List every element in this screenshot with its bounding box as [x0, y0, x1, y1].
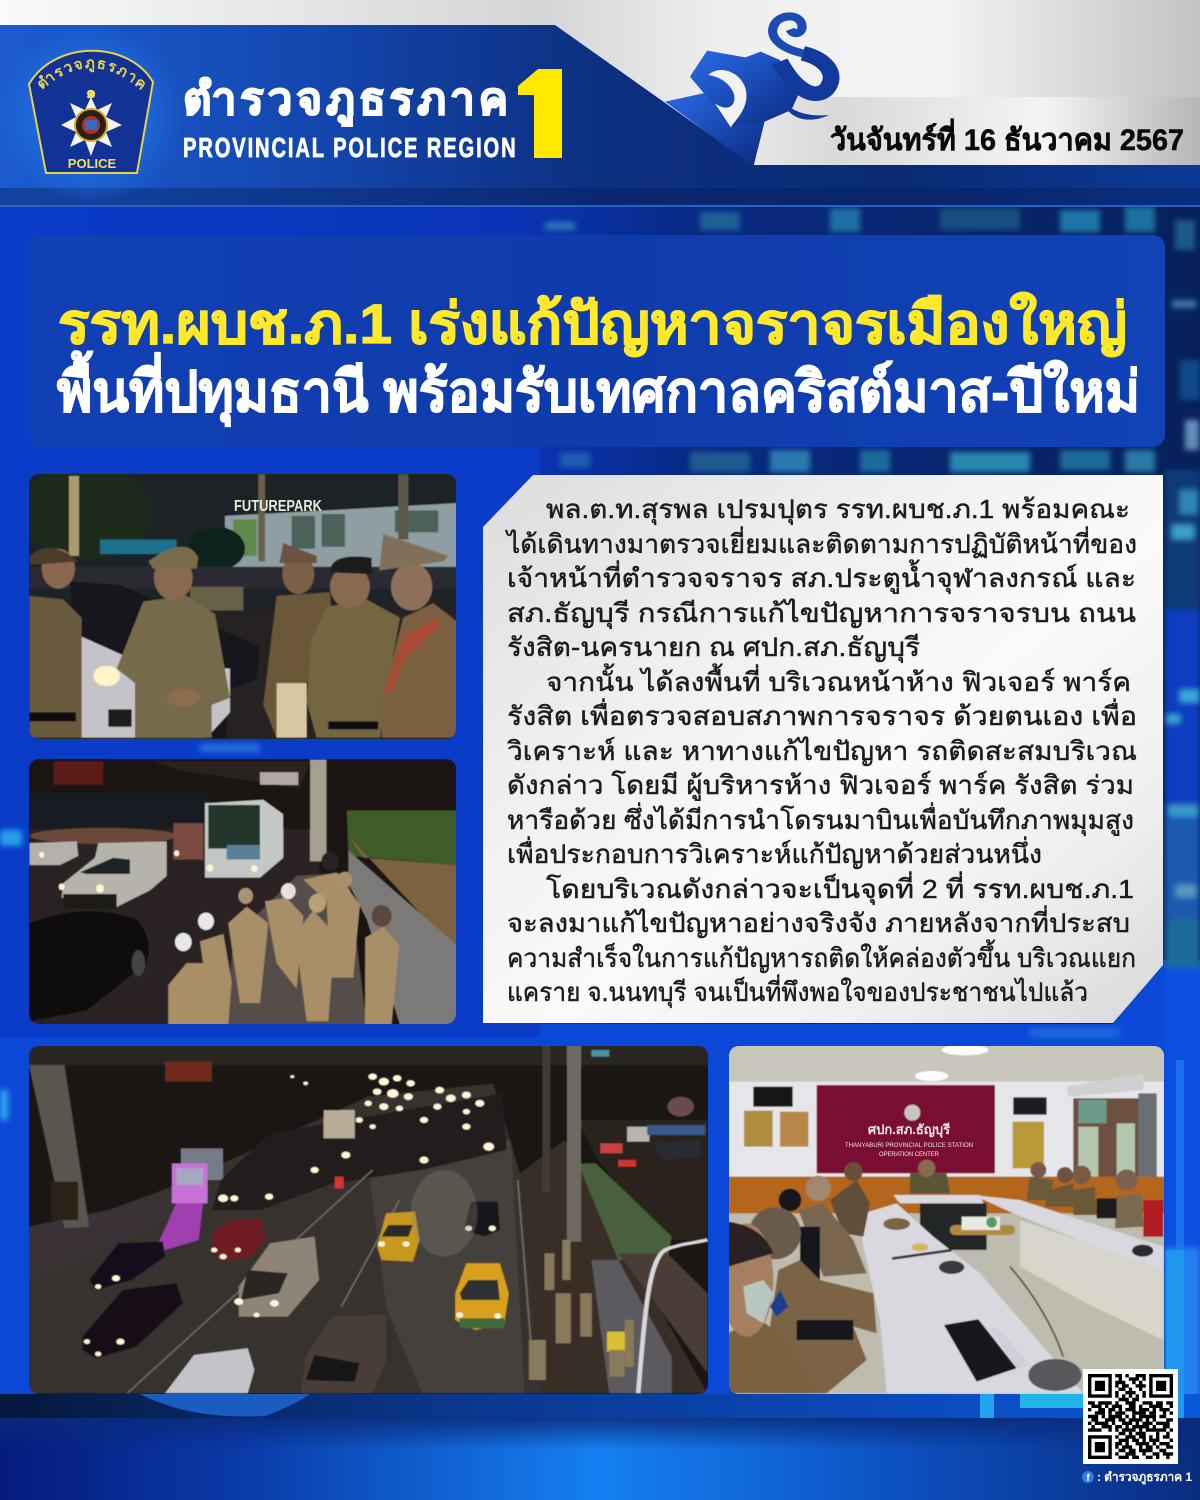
photo: officers beside traffic and bus: [29, 759, 457, 1025]
lower background strip: [0, 1394, 1200, 1418]
paragraph 1: รังสิต-นครนายก ณ ศปก.สภ.ธัญบุรี: [507, 632, 920, 663]
heading: organisation name: ตำรวจภูธรภาค: [183, 75, 508, 126]
facebook credit: : ตำรวจภูธรภาค 1: [1097, 1470, 1192, 1485]
paragraph 2: จากนั้น ได้ลงพื้นที่ บริเวณหน้าห้าง ฟิวเจอร์ พาร์ค: [546, 663, 1131, 697]
paragraph 2: ดังกล่าว โดยมี ผู้บริหารห้าง ฟิวเจอร์ พาร์ค รังสิต ร่วม: [507, 770, 1134, 801]
photo wall sign text: ศปก.สภ.ธัญบุรี: [868, 1122, 950, 1138]
heading: organisation name: [183, 75, 516, 164]
paragraph 3: ความสำเร็จในการแก้ปัญหารถติดให้คล่องตัวขึ้น บริเวณแยก: [507, 939, 1136, 973]
title line 1: รรท.ผบช.ภ.1 เร่งแก้ปัญหาจราจรเมืองใหญ่: [58, 291, 1127, 357]
icon: police badge: ๑: [86, 83, 96, 102]
paragraph 1: เจ้าหน้าที่ตำรวจจราจร สภ.ประตูน้ำจุฬาลงกรณ์ และ: [507, 559, 1136, 594]
paragraph 3: จะลงมาแก้ไขปัญหาอย่างจริงจัง ภายหลังจากที่ประสบ: [507, 905, 1130, 938]
icon: elephant: [665, 16, 831, 165]
paragraph 2: เพื่อประกอบการวิเคราะห์แก้ปัญหาด้วยส่วนหนึ่ง: [507, 836, 1042, 869]
paragraph 2: รังสิต เพื่อตรวจสอบสภาพการจราจร ด้วยตนเอง เพื่อ: [507, 698, 1137, 731]
header top grey strip: [0, 0, 1200, 166]
panel: title: [29, 235, 1165, 447]
paragraph 3: แคราย จ.นนทบุรี จนเป็นที่พึงพอใจของประชาชนไปแล้ว: [507, 974, 1088, 1008]
paragraph 1: [505, 494, 1137, 663]
photo: meeting room: [720, 1045, 1165, 1394]
photo wall sign text: THANYABURI PROVINCIAL POLICE STATION: [845, 1143, 973, 1149]
heading: yellow numeral 1: [518, 69, 562, 158]
heading: yellow numeral 1: 1: [512, 47, 581, 185]
paragraph 2: [507, 663, 1137, 869]
title line 2: พื้นที่ปทุมธานี พร้อมรับเทศกาลคริสต์มาส-ปีใหม่: [57, 351, 1140, 427]
paragraph 1: ได้เดินทางมาตรวจเยี่ยมและติดตามการปฏิบัติหน้าที่ของ: [505, 526, 1137, 559]
icon: police badge: POLICE: [68, 156, 117, 171]
photo sign text: FUTUREPARK: [234, 498, 322, 515]
icon: police badge: [22, 42, 171, 198]
photo: officers in front of Future Park: [20, 465, 458, 739]
icon: police badge: ตำรวจภูธรภาค: [38, 59, 145, 90]
photo: congested road at night: [28, 1045, 709, 1394]
paragraph 1: สภ.ธัญบุรี กรณีการแก้ไขปัญหาการจราจรบน ถนน: [507, 598, 1136, 629]
paragraph 2: หารือด้วย ซึ่งได้มีการนำโดรนมาบินเพื่อบันทึกภาพมุมสูง: [507, 802, 1134, 836]
paragraph 2: วิเคราะห์ และ หาทางแก้ไขปัญหา รถติดสะสมบริเวณ: [507, 736, 1137, 766]
header blue band: [0, 25, 1200, 207]
panel: article text: [483, 475, 1163, 1023]
paragraph 1: พล.ต.ท.สุรพล เปรมปุตร รรท.ผบช.ภ.1 พร้อมคณะ: [546, 494, 1130, 525]
paragraph 3: [507, 871, 1136, 1008]
footer band: [0, 1418, 1200, 1500]
date: วันจันทร์ที่ 16 ธันวาคม 2567: [830, 118, 1184, 157]
icon: facebook: f: [1086, 1473, 1090, 1484]
heading: organisation name: PROVINCIAL POLICE REGION: [183, 133, 516, 164]
photo wall sign text: [845, 1122, 973, 1158]
QR code: [1083, 1369, 1178, 1464]
paragraph 3: โดยบริเวณดังกล่าวจะเป็นจุดที่ 2 ที่ รรท.ผบช.ภ.1: [546, 871, 1134, 905]
photo wall sign text: OPERATION CENTER: [879, 1152, 940, 1158]
